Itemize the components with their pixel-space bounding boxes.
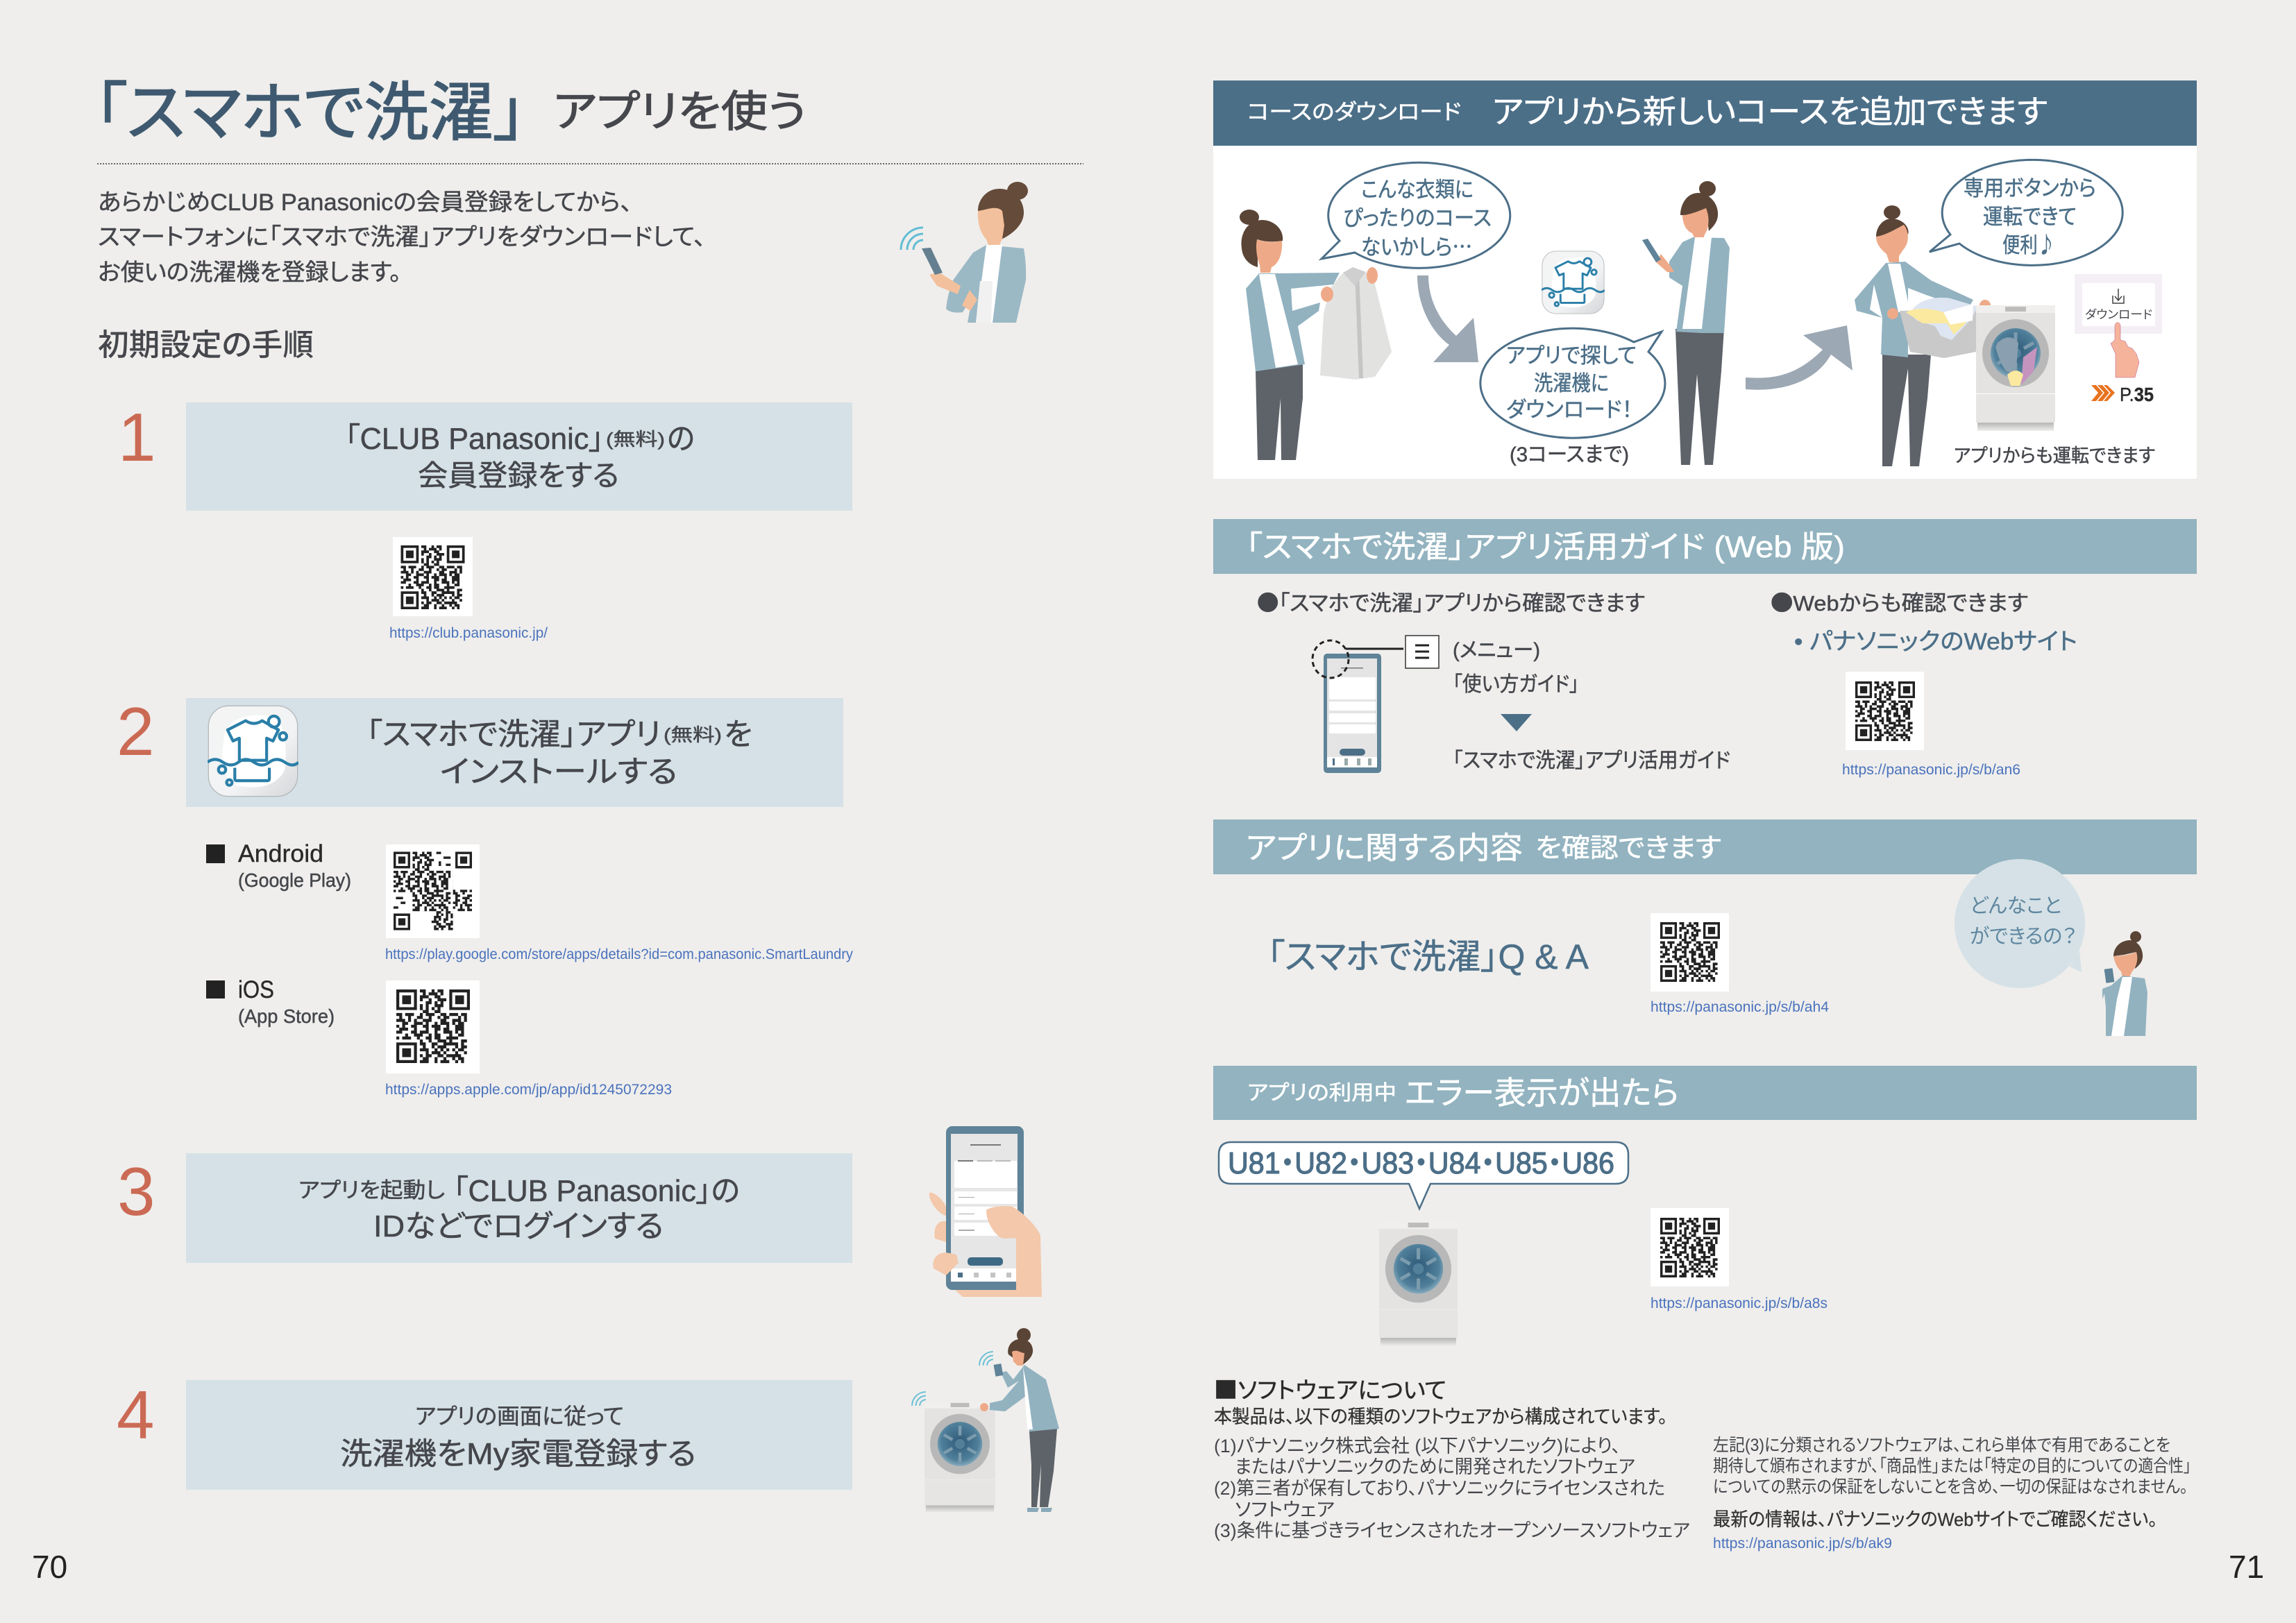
step number 3: 3 bbox=[117, 1153, 155, 1230]
callout: what can it do: どんなこと bbox=[1970, 895, 2061, 917]
step 1 label: (無料) bbox=[606, 429, 665, 450]
QR code: web guide bbox=[1846, 672, 1924, 750]
software list: (3)条件に基づきライセンスされたオープンソースソフトウェア bbox=[1214, 1520, 1690, 1541]
callout: dedicated button bbox=[1930, 160, 2122, 265]
QR code: CLUB Panasonic bbox=[393, 537, 473, 616]
callout: looking for a course: ぴったりのコース bbox=[1343, 206, 1492, 230]
iOS label bbox=[206, 976, 335, 1027]
web site label: • パナソニックのWebサイト bbox=[1794, 629, 2077, 655]
step 3 label: IDなどでログインする bbox=[373, 1209, 664, 1243]
menu instructions: 「使い方ガイド」 bbox=[1453, 673, 1579, 696]
software list: ソフトウェア bbox=[1235, 1499, 1335, 1520]
note: up to 3 courses: (3コースまで) bbox=[1510, 443, 1629, 466]
software disclaimer: 左記(3)に分類されるソフトウェアは、これら単体で有用であることを bbox=[1713, 1436, 2170, 1455]
QR code: Q&A bbox=[1651, 913, 1729, 992]
step 3 bbox=[117, 1126, 1042, 1297]
software disclaimer bbox=[1713, 1436, 2191, 1497]
illustration: washing machine bbox=[1976, 305, 2055, 431]
header bar: アプリの利用中 bbox=[1247, 1082, 1396, 1105]
step 1 label: 会員登録をする bbox=[418, 459, 619, 492]
step number 4: 4 bbox=[117, 1377, 155, 1453]
URL: https://panasonic.jp/s/b/ak9 bbox=[1713, 1536, 1892, 1552]
step 2 box bbox=[186, 698, 843, 807]
step 3 label: アプリを起動し bbox=[298, 1178, 445, 1203]
panel: web guide bbox=[1213, 519, 2197, 778]
step 4 label bbox=[340, 1404, 696, 1471]
header bar bbox=[1213, 819, 2197, 874]
QR code: error bbox=[1651, 1208, 1729, 1286]
caption: app control: アプリからも運転できます bbox=[1954, 445, 2155, 466]
illustration: washing machine bbox=[1379, 1221, 1458, 1346]
step 4 label: アプリの画面に従って bbox=[415, 1404, 624, 1429]
illustration: phone in hand bbox=[929, 1126, 1042, 1297]
QR code: Android bbox=[386, 844, 480, 938]
page title: アプリを使う bbox=[553, 88, 807, 136]
app route heading: ●「スマホで洗濯」アプリから確認できます bbox=[1257, 586, 1645, 617]
callout: download: 洗濯機に bbox=[1534, 371, 1609, 396]
software heading: ■ソフトウェアについて bbox=[1214, 1372, 1446, 1405]
step 1 bbox=[118, 399, 852, 641]
panel: Q&A bbox=[1213, 819, 2197, 1036]
step 4 box bbox=[186, 1380, 852, 1490]
software intro: 本製品は、以下の種類のソフトウェアから構成されています。 bbox=[1214, 1407, 1667, 1427]
software list bbox=[1214, 1436, 1690, 1541]
software disclaimer: についての黙示の保証をしないことを含め、一切の保証はなされません。 bbox=[1713, 1477, 2188, 1497]
callout: looking for a course: ないかしら… bbox=[1361, 230, 1472, 261]
URL: https://panasonic.jp/s/b/an6 bbox=[1842, 762, 2020, 778]
intro text: あらかじめCLUB Panasonicの会員登録をしてから、 bbox=[98, 189, 632, 216]
step 1 box bbox=[186, 402, 852, 511]
callout: dedicated button: 便利♪ bbox=[2002, 228, 2055, 259]
step 4 label: 洗濯機をMy家電登録する bbox=[340, 1437, 696, 1471]
download button with finger bbox=[2075, 274, 2162, 377]
callout: download: アプリで探して bbox=[1506, 343, 1637, 368]
step 3 box bbox=[186, 1153, 852, 1263]
Android label: Android bbox=[238, 840, 323, 867]
header bar: 「スマホで洗濯」アプリ活用ガイド (Web 版) bbox=[1246, 530, 1845, 564]
step 1 label bbox=[345, 422, 695, 492]
page title bbox=[94, 78, 807, 148]
software notice bbox=[1214, 1372, 2191, 1552]
step number 2: 2 bbox=[117, 693, 155, 770]
step 3 label bbox=[298, 1174, 740, 1243]
URL Android: https://play.google.com/store/apps/details?id=com.panasonic.SmartLaundry bbox=[385, 946, 853, 962]
page number 70: 70 bbox=[32, 1549, 67, 1585]
step 2 label: を bbox=[724, 717, 752, 751]
callout: error codes bbox=[1219, 1138, 1628, 1209]
menu instructions: 「スマホで洗濯」アプリ活用ガイド bbox=[1453, 749, 1730, 772]
header bar: コースのダウンロード bbox=[1247, 100, 1461, 124]
header bar: エラー表示が出たら bbox=[1405, 1075, 1679, 1111]
section heading: setup steps: 初期設定の手順 bbox=[98, 328, 314, 362]
page title: 「スマホで洗濯」 bbox=[94, 78, 526, 148]
intro text bbox=[98, 189, 706, 286]
header bar bbox=[1213, 519, 2197, 574]
step 2 label bbox=[366, 717, 752, 789]
software disclaimer: 期待して頒布されますが、「商品性」または「特定の目的についての適合性」 bbox=[1713, 1456, 2191, 1476]
URL: https://panasonic.jp/s/b/a8s bbox=[1651, 1295, 1827, 1311]
callout: download bbox=[1480, 328, 1665, 438]
step 1 label: 「CLUB Panasonic」 bbox=[345, 422, 604, 456]
panel: course download bbox=[1213, 80, 2197, 479]
step 4 bbox=[117, 1328, 1059, 1513]
icon: app bbox=[208, 706, 298, 797]
callout: looking for a course bbox=[1322, 162, 1510, 268]
step number 1: 1 bbox=[118, 399, 156, 475]
Android label bbox=[206, 840, 351, 891]
URL: https://panasonic.jp/s/b/ah4 bbox=[1651, 999, 1829, 1015]
callout: dedicated button: 運転できて bbox=[1983, 205, 2077, 229]
header bar bbox=[1213, 80, 2197, 146]
Q&A title: 「スマホで洗濯」Q & A bbox=[1267, 937, 1589, 976]
callout: dedicated button: 専用ボタンから bbox=[1964, 176, 2096, 201]
URL: https://club.panasonic.jp/ bbox=[389, 625, 548, 641]
web route heading: ●Webからも確認できます bbox=[1771, 586, 2028, 617]
step 1 label: の bbox=[667, 422, 695, 456]
step 2 label: 「スマホで洗濯」アプリ bbox=[366, 717, 661, 751]
step 2 label: インストールする bbox=[440, 755, 677, 789]
iOS label: iOS bbox=[238, 976, 274, 1003]
illustration: woman with smartphone bbox=[901, 182, 1028, 323]
page reference P.35: P.35 bbox=[2120, 384, 2154, 405]
illustration: woman with phone bbox=[1642, 181, 1730, 465]
step 2 bbox=[117, 693, 853, 1098]
callout: looking for a course: こんな衣類に bbox=[1361, 178, 1474, 202]
header bar: アプリに関する内容 bbox=[1246, 831, 1523, 865]
arrow: triangle down bbox=[1501, 714, 1532, 731]
URL iOS: https://apps.apple.com/jp/app/id1245072293 bbox=[385, 1082, 672, 1098]
download button with finger: ダウンロード bbox=[2085, 308, 2152, 321]
illustration: woman with phone bbox=[2102, 931, 2147, 1036]
step 2 label: (無料) bbox=[664, 724, 722, 745]
callout: error codes: U81・U82・U83・U84・U85・U86 bbox=[1228, 1138, 1614, 1182]
icon: app bbox=[1542, 251, 1605, 314]
callout: what can it do bbox=[1955, 859, 2085, 988]
step 3 label: 「CLUB Panasonic」の bbox=[453, 1174, 740, 1208]
menu instructions: (メニュー) bbox=[1453, 639, 1540, 662]
illustration: woman with laundry basket bbox=[1855, 205, 1991, 466]
latest info: 最新の情報は、パナソニックのWebサイトでご確認ください。 bbox=[1713, 1509, 2157, 1530]
header bar bbox=[1213, 1066, 2197, 1120]
arrow up bbox=[1746, 325, 1852, 390]
iOS label: (App Store) bbox=[238, 1005, 335, 1027]
page number 71: 71 bbox=[2229, 1549, 2264, 1585]
software list: (1)パナソニック株式会社 (以下パナソニック)により、 bbox=[1214, 1436, 1621, 1456]
intro text: スマートフォンに「スマホで洗濯」アプリをダウンロードして、 bbox=[98, 224, 706, 250]
callout: download: ダウンロード！ bbox=[1506, 398, 1632, 422]
illustration: woman and washing machine bbox=[912, 1328, 1059, 1513]
panel: error display bbox=[1213, 1066, 2197, 1346]
software list: またはパナソニックのために開発されたソフトウェア bbox=[1235, 1456, 1635, 1477]
menu instructions bbox=[1453, 639, 1730, 772]
page reference P.35 bbox=[2091, 384, 2154, 405]
Android label: (Google Play) bbox=[238, 869, 351, 891]
header bar: アプリから新しいコースを追加できます bbox=[1492, 94, 2048, 130]
callout: what can it do: ができるの？ bbox=[1970, 925, 2077, 948]
panel background bbox=[1213, 146, 2197, 479]
QR code: iOS bbox=[386, 980, 480, 1073]
intro text: お使いの洗濯機を登録します。 bbox=[98, 260, 401, 286]
software list: (2)第三者が保有しており、パナソニックにライセンスされた bbox=[1214, 1478, 1665, 1499]
illustration: woman holding shirt bbox=[1240, 210, 1392, 460]
arrow down bbox=[1417, 275, 1478, 362]
illustration: phone with menu bbox=[1312, 636, 1439, 773]
header bar: を確認できます bbox=[1535, 834, 1721, 863]
